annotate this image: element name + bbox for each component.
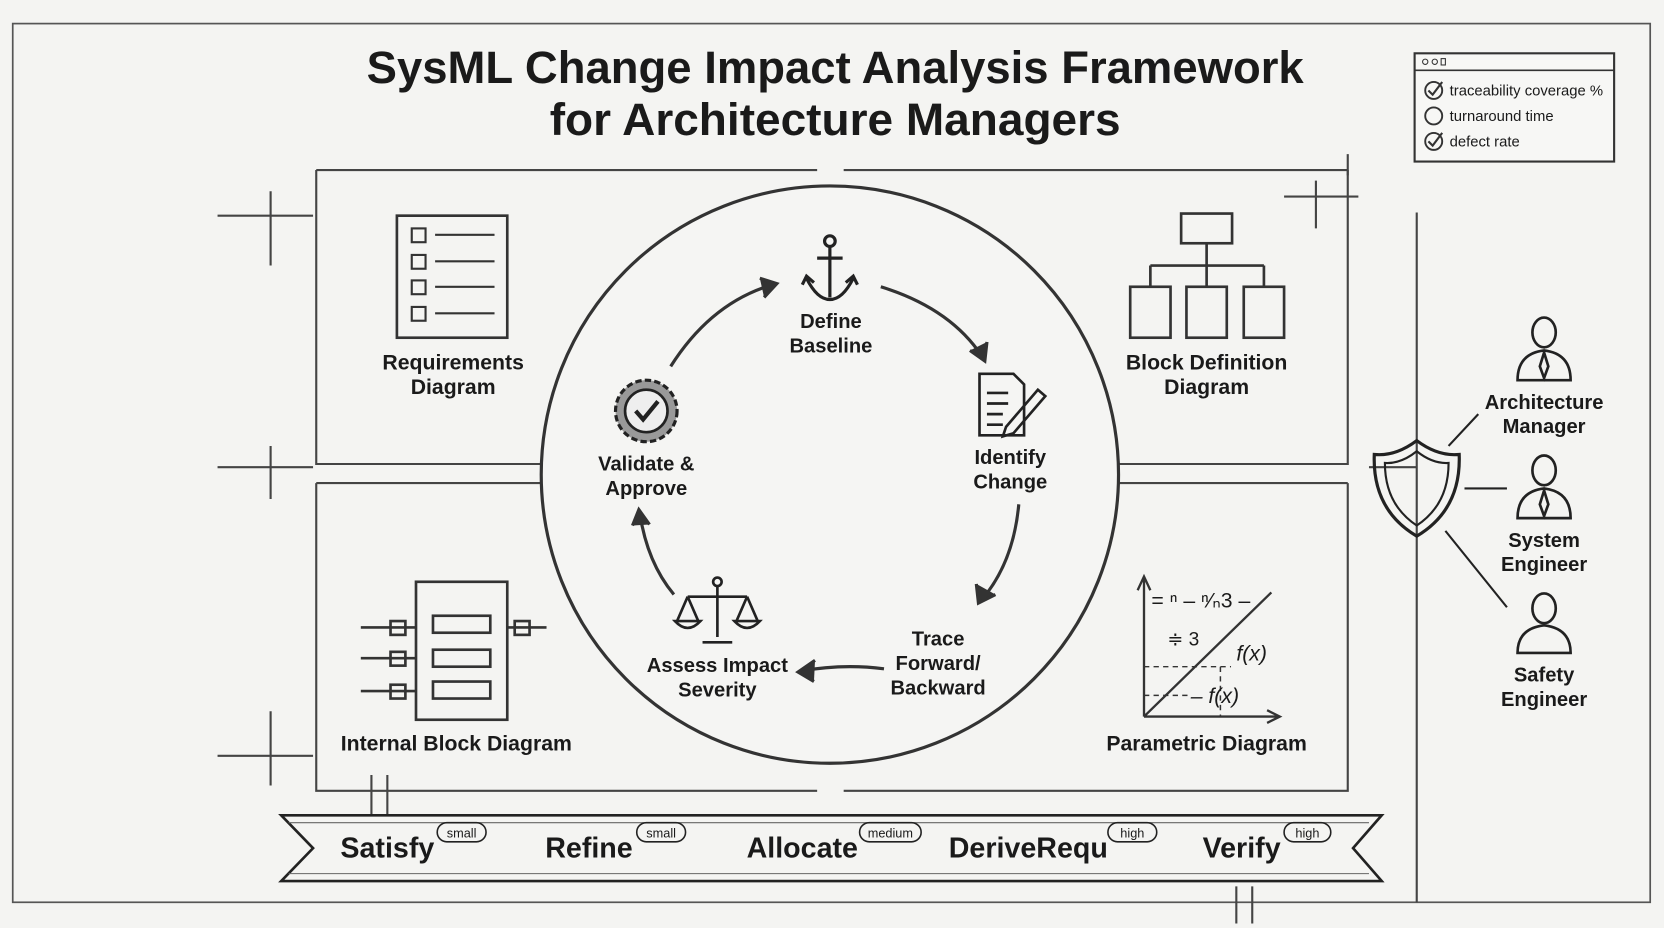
cycle: Trace Forward/Backward: Trace [912,628,964,650]
cycle: Define Baseline: Baseline [789,336,872,358]
panel: Parametric Diagram [1106,576,1307,756]
panel: Parametric Diagram: f(x) [1236,642,1267,665]
panel: Block Definition Diagram: Diagram [1164,376,1249,399]
cycle: Validate & Approve [598,380,694,500]
quadrant frames [218,154,1417,924]
cycle: Assess Impact Severity [647,578,788,701]
title: for Architecture Managers [550,94,1121,145]
person: Architecture Manager [1485,318,1603,438]
cycle: Assess Impact Severity: Assess Impact [647,655,788,677]
arrows: cycle [632,278,1019,682]
cycle: Define Baseline [789,236,872,358]
cycle: Identify Change: Change [973,471,1047,493]
panel: Parametric Diagram: Parametric Diagram [1106,733,1307,756]
banner: relationships: Satisfy [340,833,434,865]
panel: Parametric Diagram: – f(x) [1190,685,1239,708]
big circle [541,186,1119,763]
panel: Block Definition Diagram [1126,214,1287,399]
banner: relationships [281,815,1382,881]
banner: relationships: medium [868,826,913,841]
person: System Engineer: Engineer [1501,554,1587,576]
banner: relationships: high [1295,826,1319,841]
icon: shield [1374,414,1507,607]
cycle: Validate & Approve: Validate & [598,453,694,475]
person: System Engineer [1501,456,1587,576]
banner: relationships: small [447,826,476,841]
checklist: KPIs [1415,53,1614,162]
banner: relationships: Verify [1203,833,1281,865]
person: Safety Engineer: Engineer [1501,689,1587,711]
banner: relationships: Refine [545,833,633,865]
cycle: Assess Impact Severity: Severity [678,679,757,701]
title [367,42,1304,145]
panel: Parametric Diagram: ≑ 3 [1167,629,1199,650]
person: Architecture Manager: Manager [1503,416,1586,438]
cycle: Identify Change [973,374,1047,493]
panel: Requirements Diagram: Requirements [382,352,524,375]
banner: relationships: small [646,826,676,841]
right line [1416,212,1418,902]
banner: relationships: high [1120,826,1144,841]
panel: Internal Block Diagram [341,582,572,756]
cycle: Trace Forward/Backward: Forward/ [896,653,981,675]
banner: relationships: DeriveRequ [949,833,1108,865]
checklist: KPIs: turnaround time [1450,109,1554,125]
panel: Block Definition Diagram: Block Definition [1126,352,1287,375]
banner: relationships: Allocate [747,833,858,865]
cycle: Identify Change: Identify [974,447,1047,469]
panel: Requirements Diagram: Diagram [411,376,496,399]
person: Architecture Manager: Architecture [1485,392,1603,414]
person: Safety Engineer [1501,593,1587,711]
panel: Parametric Diagram: = ⁿ – ⁿ⁄ₙ3 – [1151,589,1250,612]
cycle: Trace Forward/Backward [891,628,986,699]
person: Safety Engineer: Safety [1514,665,1575,687]
panel: Internal Block Diagram: Internal Block Diagram [341,733,572,756]
checklist: KPIs: defect rate [1450,135,1520,151]
title: SysML Change Impact Analysis Framework [367,42,1304,93]
person: System Engineer: System [1508,530,1580,552]
cycle: Trace Forward/Backward: Backward [891,677,986,699]
panel: Requirements Diagram [382,216,524,399]
cycle: Validate & Approve: Approve [605,478,687,500]
checklist: KPIs: traceability coverage % [1450,84,1603,100]
cycle: Define Baseline: Define [800,311,862,333]
